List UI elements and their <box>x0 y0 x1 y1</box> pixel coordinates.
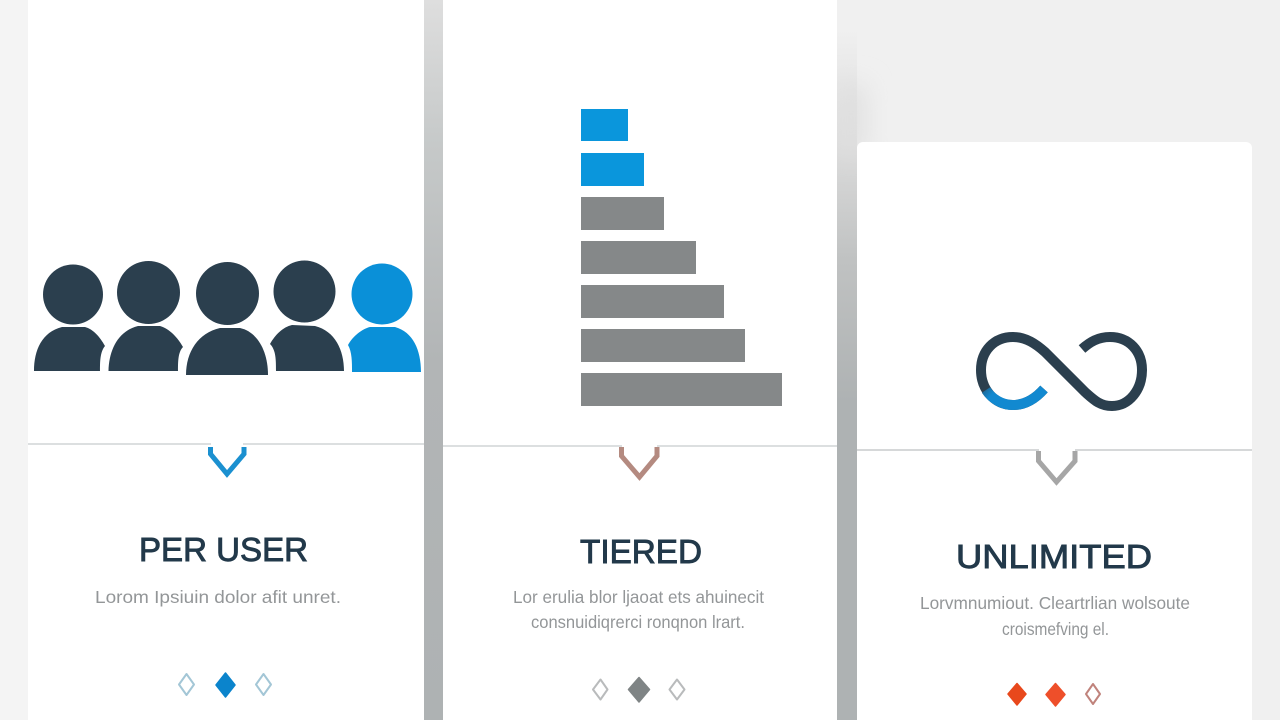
shadow strip between cards 1 and 2 <box>424 0 443 720</box>
description: per user: Lorom Ipsiuin dolor afit unret. <box>95 587 341 607</box>
description: unlimited: croismefving el. <box>1002 619 1109 639</box>
rating diamonds: per user <box>179 673 271 697</box>
chevron: tiered <box>622 444 657 477</box>
description: unlimited <box>920 593 1190 639</box>
rating diamonds: tiered <box>593 678 684 702</box>
heading: per user: PER USER <box>139 531 308 568</box>
chevron: unlimited <box>1038 448 1075 482</box>
rating diamonds: unlimited <box>1008 684 1100 706</box>
icon: group of users <box>34 260 421 375</box>
heading: tiered: TIERED <box>580 533 702 570</box>
panel: unlimited <box>857 142 1252 720</box>
description: tiered: Lor erulia blor ljaoat ets ahuinecit <box>513 587 764 607</box>
chart: tier bars <box>581 109 782 406</box>
panel: per user <box>28 0 424 720</box>
heading: unlimited: UNLIMITED <box>956 538 1152 575</box>
left margin <box>0 0 28 720</box>
panel: tiered <box>443 0 837 720</box>
icon: infinity <box>981 337 1142 406</box>
chevron: per user <box>210 442 244 474</box>
description: tiered: consnuidiqrerci ronqnon lrart. <box>531 612 745 632</box>
description: unlimited: Lorvmnumiout. Cleartrlian wolsoute <box>920 593 1190 613</box>
description: tiered <box>513 587 764 632</box>
shadow strip between cards 2 and 3 <box>837 0 865 720</box>
